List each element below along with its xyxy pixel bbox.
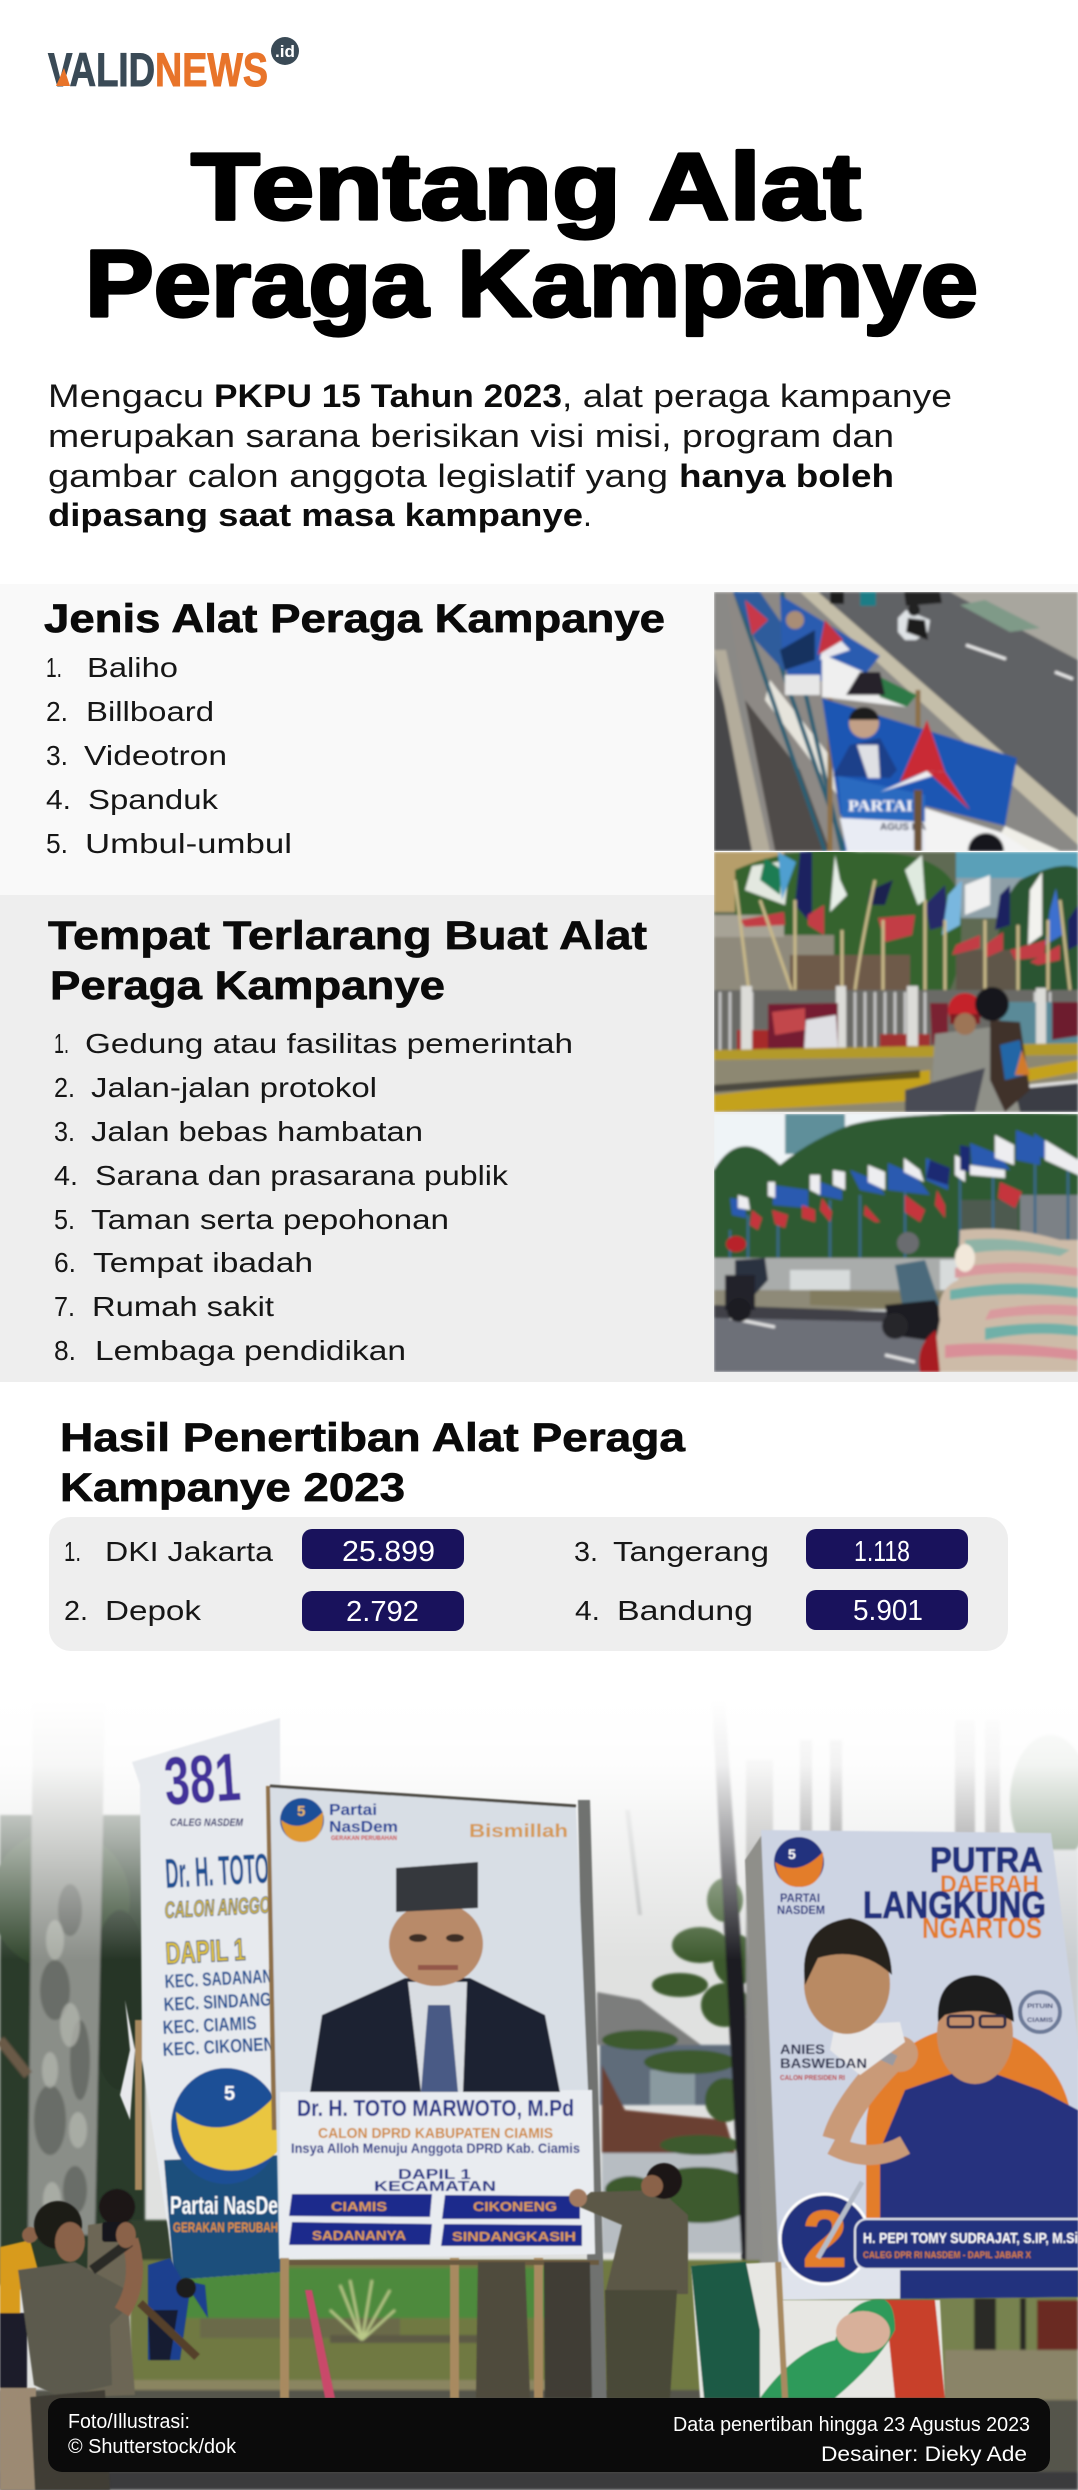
- panel: jenis alat peraga kampanye: [0, 584, 1078, 895]
- billboard: Dr. H. Toto Marwoto: SADANANYA: [312, 2228, 407, 2243]
- photo: flags along overpass: [714, 592, 1078, 851]
- panel: tempat terlarang: [0, 895, 1078, 1382]
- intro paragraph: dipasang saat masa kampanye: [48, 497, 583, 533]
- heading: hasil penertiban: [60, 1416, 686, 1510]
- photo credit: © Shutterstock/dok: [68, 2436, 237, 2458]
- list: jenis: Baliho: [87, 652, 178, 683]
- billboard: Dr. H. Toto Marwoto: 5: [297, 1803, 305, 1820]
- stat: Depok: Depok: [105, 1595, 202, 1626]
- stat: Depok: 2.: [64, 1595, 88, 1626]
- billboard: Dr. H. Toto Marwoto: Dr. H. TOTO MARWOTO, M.Pd: [297, 2095, 574, 2121]
- list: tempat terlarang: 4.: [54, 1160, 78, 1191]
- billboard: left banner: GERAKAN PERUBAH: [173, 2219, 278, 2235]
- billboard: Dr. H. Toto Marwoto: CALON DPRD KABUPATEN CIAMIS: [318, 2125, 553, 2142]
- stat: Bandung: [575, 1590, 968, 1630]
- billboard: left banner: [120, 1718, 282, 2280]
- heading: tempat terlarang: Peraga Kampanye: [50, 964, 445, 1008]
- billboard: Putra Daerah Langkung Ngartos: LANGKUNG: [863, 1885, 1046, 1927]
- stat: Bandung: 4.: [575, 1595, 600, 1626]
- person: officer at right pole: [569, 2163, 688, 2398]
- billboard: Dr. H. Toto Marwoto: CIKONENG: [473, 2199, 557, 2214]
- intro paragraph: hanya boleh: [679, 458, 894, 494]
- list: jenis: Videotron: [84, 740, 227, 771]
- photo: flags and banners behind fence: [714, 850, 1078, 1112]
- billboard: left banner: 5: [224, 2083, 235, 2105]
- billboard: left banner: CALON ANGGO: [164, 1891, 271, 1923]
- stat: Bandung: 5.901: [853, 1595, 923, 1627]
- photo: flags along overpass: PARTAI: [848, 798, 913, 815]
- list: tempat terlarang: Jalan bebas hambatan: [91, 1116, 423, 1147]
- billboard: Putra Daerah Langkung Ngartos: 2: [802, 2194, 848, 2285]
- person: yellow jacket: [0, 2227, 38, 2490]
- heading: jenis: Jenis Alat Peraga Kampanye: [44, 597, 665, 641]
- billboard: left banner: KEC. SADANAN: [164, 1966, 273, 1993]
- ground: [130, 2260, 760, 2400]
- list: jenis: 4.: [46, 784, 71, 815]
- photo: officers removing campaign billboards: Dr. H. TOTO: [164, 1845, 270, 1897]
- heading: hasil penertiban: Kampanye 2023: [60, 1466, 405, 1510]
- intro paragraph: , alat peraga kampanye: [562, 378, 952, 414]
- list: tempat terlarang: 8.: [54, 1335, 76, 1366]
- banner: green candidate banner under billboard: [691, 2262, 945, 2398]
- list: tempat terlarang: 1.: [54, 1028, 69, 1059]
- photo: officers removing campaign billboards: [0, 1700, 1078, 2490]
- logo: VALIDNEWS.id: [48, 37, 299, 96]
- billboard: Dr. H. Toto Marwoto: Partai: [329, 1802, 377, 1819]
- billboard: Dr. H. Toto Marwoto: KECAMATAN: [374, 2178, 496, 2195]
- billboard: Putra Daerah Langkung Ngartos: NGARTOS: [922, 1913, 1042, 1945]
- billboard: left banner: KEC. SINDANG: [163, 1989, 272, 2016]
- stat: DKI Jakarta: 1.: [64, 1536, 81, 1567]
- billboard: Putra Daerah Langkung Ngartos: CALEG DPR RI NASDEM - DAPIL JABAR X: [863, 2250, 1031, 2260]
- logo: VALIDNEWS.id: NEWS: [155, 43, 268, 96]
- list: jenis: 2.: [46, 696, 68, 727]
- list: tempat terlarang: Tempat ibadah: [93, 1247, 313, 1278]
- billboard: Dr. H. Toto Marwoto: SINDANGKASIH: [452, 2229, 576, 2244]
- people: officers: [0, 2163, 688, 2490]
- photo credit: Foto/Illustrasi:: [68, 2411, 190, 2433]
- ground right of billboard: [941, 2390, 946, 2398]
- list: jenis: Billboard: [86, 696, 214, 727]
- list: tempat terlarang: 2.: [54, 1072, 75, 1103]
- billboard: Putra Daerah Langkung Ngartos: PITUIN: [1027, 2004, 1053, 2010]
- stat: Depok: [64, 1591, 464, 1631]
- title: Tentang Alat: [191, 134, 861, 240]
- list: jenis: Umbul-umbul: [85, 828, 292, 859]
- billboard: left banner: Partai NasDe: [170, 2192, 278, 2220]
- list: tempat terlarang: Jalan-jalan protokol: [91, 1072, 377, 1103]
- billboard: Dr. H. Toto Marwoto: DAPIL 1: [398, 2166, 471, 2183]
- billboard: left banner: KEC. CIAMIS: [162, 2013, 257, 2039]
- billboard: Putra Daerah Langkung Ngartos: CIAMIS: [1027, 2018, 1053, 2024]
- person: officer behind with camera: [85, 2189, 135, 2397]
- billboard: left banner: 381: [162, 1739, 243, 1820]
- photo: flags along road with sack cargo: [714, 1113, 1078, 1372]
- list: tempat terlarang: 7.: [54, 1291, 75, 1322]
- list: tempat terlarang: 6.: [54, 1247, 76, 1278]
- title: [85, 134, 978, 337]
- logo: VALIDNEWS.id: VALID: [48, 43, 155, 96]
- intro paragraph: merupakan sarana berisikan visi misi, program dan: [48, 418, 894, 454]
- list: jenis: 3.: [46, 740, 68, 771]
- list: tempat terlarang: [54, 1028, 573, 1366]
- stat: Tangerang: [574, 1529, 968, 1569]
- stat: DKI Jakarta: 25.899: [342, 1536, 435, 1568]
- stat: DKI Jakarta: [64, 1529, 464, 1569]
- billboard: left banner: DAPIL 1: [165, 1932, 246, 1971]
- billboard: Dr. H. Toto Marwoto: Bismillah: [469, 1821, 568, 1841]
- data note and designer: Desainer: Dieky Ade: [821, 2443, 1027, 2466]
- list: tempat terlarang: Sarana dan prasarana publik: [95, 1160, 509, 1191]
- billboard: Putra Daerah Langkung Ngartos: NASDEM: [777, 1903, 825, 1917]
- list: tempat terlarang: Taman serta pepohonan: [91, 1204, 449, 1235]
- heading: hasil penertiban: Hasil Penertiban Alat Peraga: [60, 1416, 686, 1460]
- billboard: Dr. H. Toto Marwoto: Insya Alloh Menuju Anggota DPRD Kab. Ciamis: [291, 2140, 580, 2156]
- list: tempat terlarang: 3.: [54, 1116, 75, 1147]
- white fade over background: [0, 1700, 1078, 1960]
- photo: flags along overpass: AGUS HA: [880, 822, 926, 833]
- list: jenis: 5.: [46, 828, 68, 859]
- intro paragraph: gambar calon anggota legislatif yang: [48, 458, 668, 494]
- stat: Tangerang: Tangerang: [613, 1536, 769, 1567]
- title: Peraga Kampanye: [85, 231, 978, 337]
- billboard: Putra Daerah Langkung Ngartos: CALON PRESIDEN RI: [780, 2075, 845, 2082]
- list: tempat terlarang: 5.: [54, 1204, 75, 1235]
- billboard: Putra Daerah Langkung Ngartos: [745, 1830, 1078, 2303]
- panel: hasil penertiban per daerah: [49, 1517, 1008, 1651]
- billboard: Putra Daerah Langkung Ngartos: PARTAI: [780, 1891, 820, 1905]
- intro paragraph: Mengacu: [48, 378, 204, 414]
- list: tempat terlarang: Gedung atau fasilitas pemerintah: [85, 1028, 573, 1059]
- caption bar: [48, 2398, 1050, 2472]
- billboard: Putra Daerah Langkung Ngartos: BASWEDAN: [780, 2055, 867, 2071]
- list: jenis: Spanduk: [88, 784, 219, 815]
- stat: DKI Jakarta: DKI Jakarta: [105, 1536, 273, 1567]
- person: worker in blue: [148, 2258, 208, 2360]
- logo: VALIDNEWS.id: .id: [275, 42, 295, 61]
- billboard: Dr. H. Toto Marwoto: NasDem: [329, 1819, 398, 1836]
- stat: Depok: 2.792: [346, 1596, 419, 1628]
- data note and designer: [673, 2414, 1030, 2466]
- billboard: left banner: CALEG NASDEM: [170, 1817, 244, 1829]
- person: officer photographing: [18, 2201, 136, 2490]
- stat: Bandung: Bandung: [617, 1595, 753, 1626]
- list: tempat terlarang: Lembaga pendidikan: [95, 1335, 406, 1366]
- intro paragraph: [48, 378, 952, 533]
- billboard: Dr. H. Toto Marwoto: GERAKAN PERUBAHAN: [331, 1836, 397, 1842]
- data note and designer: Data penertiban hingga 23 Agustus 2023: [673, 2414, 1030, 2436]
- billboard: Putra Daerah Langkung Ngartos: DAERAH: [940, 1871, 1039, 1898]
- billboard: Putra Daerah Langkung Ngartos: PUTRA: [930, 1841, 1043, 1880]
- heading: tempat terlarang: [48, 914, 647, 1008]
- photo credit: [68, 2413, 236, 2453]
- list: jenis: 1.: [46, 652, 62, 683]
- intro paragraph: PKPU 15 Tahun 2023: [214, 378, 562, 414]
- heading: tempat terlarang: Tempat Terlarang Buat Alat: [48, 914, 647, 958]
- billboard: Dr. H. Toto Marwoto: CIAMIS: [331, 2199, 387, 2214]
- stat: Tangerang: 1.118: [854, 1536, 910, 1568]
- background trees and buildings: [0, 1700, 1078, 2490]
- stat: Tangerang: 3.: [574, 1536, 598, 1567]
- list: tempat terlarang: Rumah sakit: [92, 1291, 274, 1322]
- billboard: Putra Daerah Langkung Ngartos: ANIES: [780, 2041, 825, 2057]
- billboard: Dr. H. Toto Marwoto: [266, 1786, 607, 2400]
- billboard: left banner: KEC. CIKONEN: [162, 2034, 275, 2061]
- list: jenis: [46, 652, 292, 859]
- billboard: Putra Daerah Langkung Ngartos: 5: [788, 1846, 796, 1862]
- intro paragraph: .: [583, 497, 592, 533]
